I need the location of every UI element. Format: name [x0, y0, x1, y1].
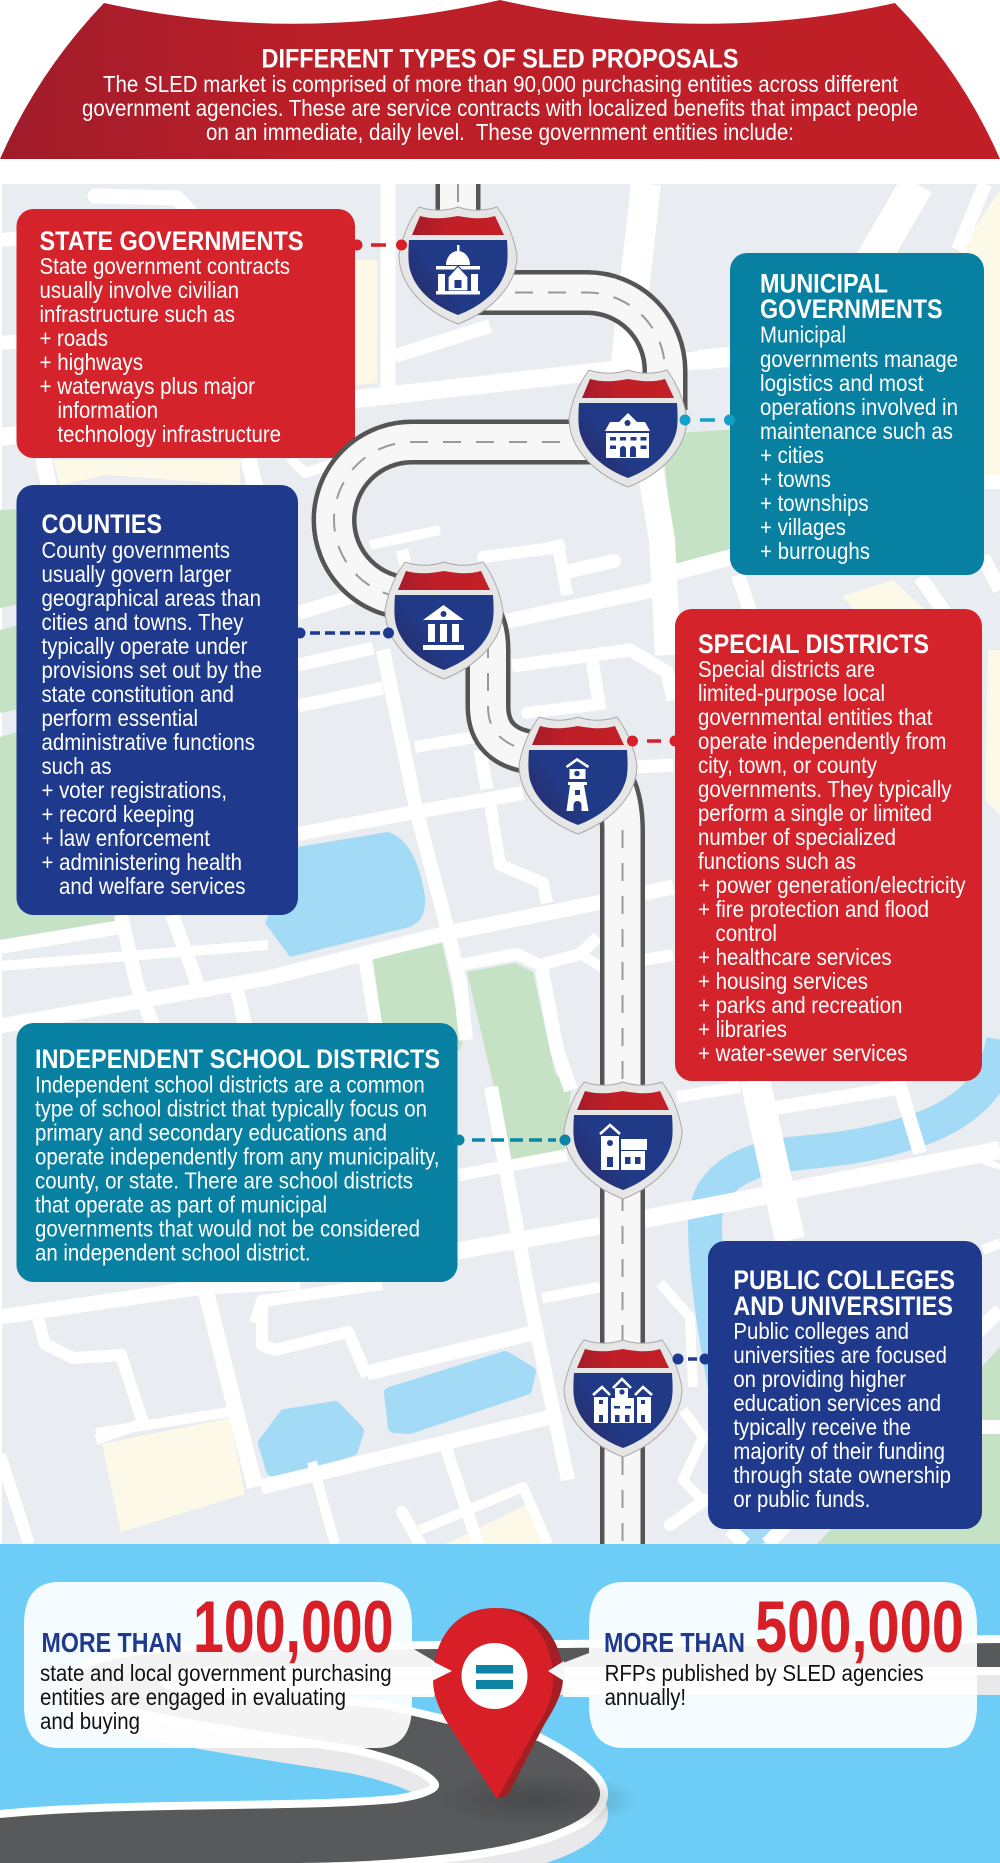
connector: public colleges	[672, 1354, 710, 1364]
text: state governments body: infrastructure such as	[40, 301, 235, 327]
text: state governments body: + highways	[40, 349, 143, 375]
text: independent school districts body: primary and secondary educations and	[35, 1120, 387, 1146]
text: counties body: usually govern larger	[42, 561, 232, 587]
text: counties body: administrative functions	[42, 729, 255, 755]
text: state governments body: + roads	[40, 325, 108, 351]
icon: university	[593, 1379, 652, 1423]
text: counties body: perform essential	[42, 705, 198, 731]
panel: special districts	[675, 609, 982, 1081]
highway sign: independent school districts	[564, 1082, 682, 1199]
winding highway	[334, 184, 665, 1544]
text: counties body: and welfare services	[59, 873, 246, 899]
connector: state governments	[352, 240, 407, 250]
text: municipal governments body: + villages	[760, 514, 846, 540]
text: independent school districts body: an independent school district.	[35, 1240, 311, 1266]
text: state governments body: usually involve civilian	[40, 277, 239, 303]
text: special districts body: operate independently from	[698, 728, 946, 754]
text: counties body: + record keeping	[42, 801, 194, 827]
connector: independent school districts	[454, 1134, 570, 1146]
text: right stat description: RFPs published by SLED agencies	[605, 1660, 924, 1686]
text: special districts body: functions such as	[698, 848, 856, 874]
text: municipal governments body: Municipal	[760, 322, 846, 348]
text: municipal governments body: operations involved in	[760, 394, 958, 420]
icon: lighthouse	[566, 760, 588, 811]
highway sign: special districts	[519, 717, 637, 834]
text: municipal governments body	[760, 322, 958, 564]
text: counties body: typically operate under	[42, 633, 248, 659]
text: municipal governments body: governments manage	[760, 346, 958, 372]
label: more than: MORE THAN	[42, 1627, 182, 1658]
panel: state governments	[16, 209, 355, 458]
panel: counties	[16, 485, 298, 915]
icon: town hall	[605, 413, 650, 458]
text: counties body: County governments	[42, 537, 230, 563]
text: counties body: + law enforcement	[42, 825, 210, 851]
text: independent school districts body: governments that would not be considered	[35, 1216, 420, 1242]
heading: state governments: STATE GOVERNMENTS	[40, 226, 304, 256]
text: special districts body: + water-sewer services	[698, 1040, 908, 1066]
text: municipal governments body: + towns	[760, 466, 831, 492]
text: counties body: state constitution and	[42, 681, 234, 707]
text: special districts body: limited-purpose local	[698, 680, 885, 706]
highway sign: public colleges and universities	[564, 1340, 682, 1457]
text: special districts body: Special districts are	[698, 656, 875, 682]
icon: capitol	[436, 245, 480, 294]
winding road with side face	[0, 1643, 1000, 1863]
header intro text: on an immediate, daily level. These government entities include:	[206, 119, 794, 145]
text: special districts body: + healthcare services	[698, 944, 892, 970]
text: public colleges body: on providing higher	[733, 1366, 906, 1392]
highway sign: state governments	[399, 207, 517, 324]
text: counties body: provisions set out by the	[42, 657, 262, 683]
panel: public colleges and universities	[708, 1241, 982, 1529]
text: municipal governments body: logistics and most	[760, 370, 924, 396]
text: special districts body: + parks and recreation	[698, 992, 902, 1018]
text: left stat description	[40, 1660, 392, 1734]
text: public colleges body: or public funds.	[733, 1486, 870, 1512]
highway sign: municipal governments	[569, 370, 687, 487]
highway sign: counties	[385, 562, 503, 679]
text: independent school districts body	[35, 1072, 439, 1266]
text: independent school districts body: operate independently from any municipality,	[35, 1144, 439, 1170]
text: left stat description: and buying	[40, 1708, 140, 1734]
text: independent school districts body: Independent school districts are a common	[35, 1072, 425, 1098]
text: special districts body: governmental entities that	[698, 704, 933, 730]
text: state governments body: State government contracts	[40, 253, 290, 279]
text: municipal governments body: + burroughs	[760, 538, 870, 564]
heading: special districts: SPECIAL DISTRICTS	[698, 629, 929, 659]
text: special districts body: governments. They typically	[698, 776, 952, 802]
text: municipal governments body: + townships	[760, 490, 869, 516]
heading: municipal governments: MUNICIPAL	[760, 269, 888, 299]
text: counties body: + voter registrations,	[42, 777, 227, 803]
header intro text	[82, 71, 918, 145]
icon: location pin with equals sign	[432, 1608, 564, 1799]
text: state governments body: technology infrastructure	[58, 421, 281, 447]
heading: public colleges and universities	[733, 1265, 955, 1321]
street map background	[0, 184, 1000, 1544]
text: independent school districts body: type of school district that typically focus on	[35, 1096, 427, 1122]
text: counties body: + administering health	[42, 849, 242, 875]
pin shadow	[430, 1772, 640, 1828]
panel: municipal governments	[730, 253, 984, 575]
header intro text: The SLED market is comprised of more than 90,000 purchasing entities across different	[103, 71, 898, 97]
header banner	[0, 0, 1000, 159]
connector: counties	[294, 628, 394, 638]
number: 100,000: 100,000	[193, 1587, 394, 1668]
text: special districts body: + libraries	[698, 1016, 787, 1042]
heading: counties: COUNTIES	[42, 509, 162, 539]
heading: independent school districts: INDEPENDENT SCHOOL DISTRICTS	[35, 1044, 440, 1074]
header title: DIFFERENT TYPES OF SLED PROPOSALS	[262, 44, 738, 74]
text: state governments body: information	[58, 397, 158, 423]
connector: special districts	[627, 736, 680, 746]
heading: public colleges and universities: PUBLIC COLLEGES	[733, 1265, 955, 1295]
text: counties body: geographical areas than	[42, 585, 261, 611]
text: right stat description: annually!	[605, 1684, 686, 1710]
text: special districts body: city, town, or county	[698, 752, 877, 778]
text: public colleges body: majority of their funding	[733, 1438, 945, 1464]
stat card: left	[24, 1582, 434, 1748]
heading: public colleges and universities: AND UNIVERSITIES	[733, 1291, 953, 1321]
text: special districts body: number of specialized	[698, 824, 896, 850]
text: right stat description	[605, 1660, 924, 1710]
text: special districts body: control	[716, 920, 777, 946]
text: special districts body	[698, 656, 966, 1066]
label: more than: MORE THAN	[604, 1627, 745, 1658]
text: public colleges body: education services and	[733, 1390, 941, 1416]
icon: school	[600, 1125, 647, 1170]
text: counties body	[42, 537, 262, 899]
text: special districts body: + fire protection and flood	[698, 896, 929, 922]
text: public colleges body	[733, 1318, 951, 1512]
text: state governments body	[40, 253, 290, 447]
text: counties body: cities and towns. They	[42, 609, 244, 635]
text: municipal governments body: maintenance such as	[760, 418, 953, 444]
text: independent school districts body: that operate as part of municipal	[35, 1192, 327, 1218]
text: public colleges body: universities are focused	[733, 1342, 947, 1368]
heading: municipal governments: GOVERNMENTS	[760, 294, 943, 324]
text: municipal governments body: + cities	[760, 442, 824, 468]
heading: municipal governments	[760, 269, 943, 324]
text: special districts body: perform a single or limited	[698, 800, 932, 826]
text: counties body: such as	[42, 753, 112, 779]
text: special districts body: + power generation/electricity	[698, 872, 966, 898]
text: state governments body: + waterways plus major	[40, 373, 255, 399]
text: left stat description: entities are engaged in evaluating	[40, 1684, 346, 1710]
icon: courthouse	[423, 605, 464, 650]
text: public colleges body: Public colleges and	[733, 1318, 909, 1344]
text: independent school districts body: county, or state. There are school districts	[35, 1168, 413, 1194]
stat card: right	[563, 1582, 977, 1748]
text: special districts body: + housing services	[698, 968, 868, 994]
bottom section background	[0, 1544, 1000, 1863]
panel: independent school districts	[16, 1023, 458, 1282]
text: public colleges body: through state ownership	[733, 1462, 951, 1488]
connector: municipal governments	[680, 414, 735, 426]
text: left stat description: state and local government purchasing	[40, 1660, 392, 1686]
text: public colleges body: typically receive the	[733, 1414, 911, 1440]
